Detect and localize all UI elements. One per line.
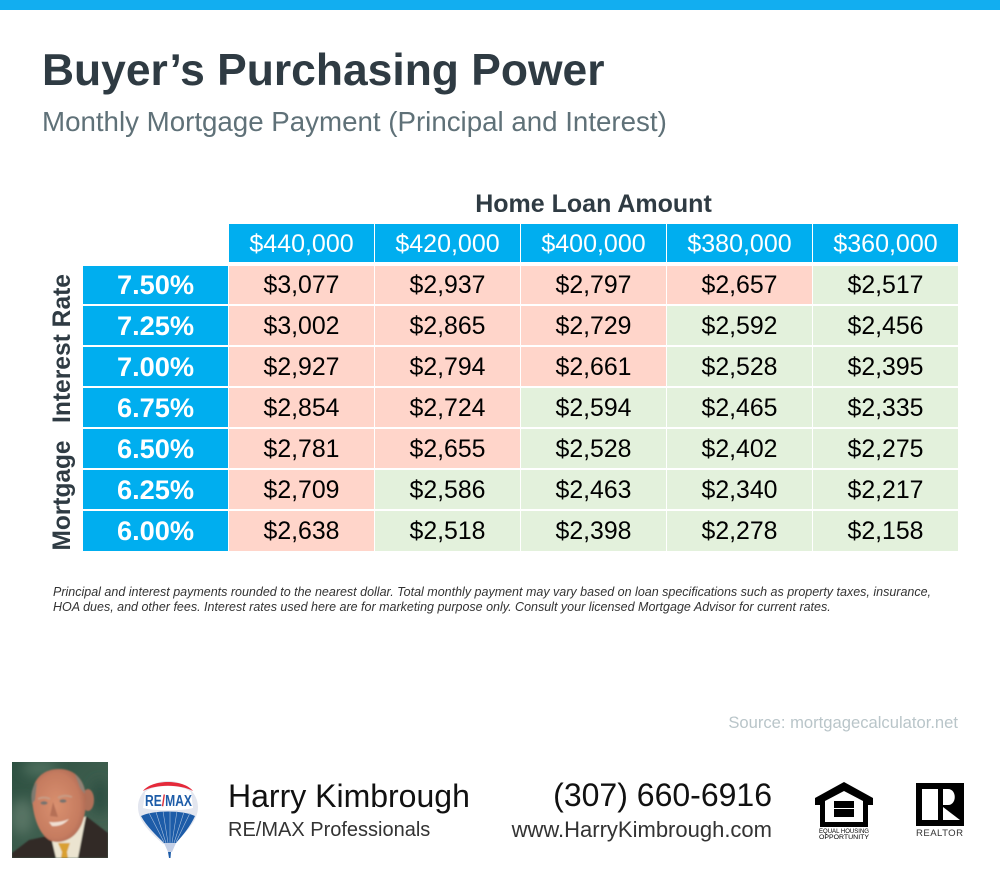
table: monthly payments: $2,937 <box>410 272 486 299</box>
table: monthly payments: $2,335 <box>848 395 924 422</box>
footnote <box>53 585 931 614</box>
table: monthly payments: $2,709 <box>264 477 340 504</box>
axis label: mortgage interest rate <box>48 274 76 550</box>
table: monthly payments: $2,794 <box>410 354 486 381</box>
table: monthly payments: $2,865 <box>410 313 486 340</box>
title: Buyer’s Purchasing Power <box>42 46 604 95</box>
table: monthly payments: $2,854 <box>264 395 340 422</box>
table: monthly payments: $2,340 <box>702 477 778 504</box>
table: monthly payments: $2,655 <box>410 436 486 463</box>
table: monthly payments: $2,528 <box>556 436 632 463</box>
table: monthly payments: $380,000 <box>687 230 792 258</box>
table: monthly payments: $2,927 <box>264 354 340 381</box>
table: monthly payments: 7.50% <box>117 269 194 300</box>
table: monthly payments: $2,594 <box>556 395 632 422</box>
table: monthly payments: $360,000 <box>833 230 938 258</box>
table: monthly payments: $2,278 <box>702 518 778 545</box>
table: monthly payments: $2,395 <box>848 354 924 381</box>
table: monthly payments: $2,517 <box>848 272 924 299</box>
icon: RE/MAX balloon: RE/MAX <box>145 793 193 810</box>
table: monthly payments: $3,002 <box>264 313 340 340</box>
table: monthly payments: $2,724 <box>410 395 486 422</box>
table: monthly payments: $3,077 <box>264 272 340 299</box>
table: monthly payments: $2,592 <box>702 313 778 340</box>
footnote: HOA dues, and other fees. Interest rates used here are for marketing purpose only. Consult your licensed Mortgage Advisor for current rates. <box>53 600 831 614</box>
heading: home loan amount: Home Loan Amount <box>475 190 712 218</box>
icon: equal housing opportunity: OPPORTUNITY <box>819 834 870 841</box>
table: monthly payments: $2,586 <box>410 477 486 504</box>
table: monthly payments: $2,275 <box>848 436 924 463</box>
table: monthly payments: $420,000 <box>395 230 500 258</box>
agency: RE/MAX Professionals <box>228 818 430 840</box>
table: monthly payments: 6.25% <box>117 474 194 505</box>
agent name: Harry Kimbrough <box>228 778 470 814</box>
table: monthly payments: $2,518 <box>410 518 486 545</box>
table: monthly payments: $2,638 <box>264 518 340 545</box>
table: monthly payments: 6.50% <box>117 433 194 464</box>
table: monthly payments: 7.25% <box>117 310 194 341</box>
table: monthly payments: $2,402 <box>702 436 778 463</box>
table: monthly payments: $2,528 <box>702 354 778 381</box>
table: monthly payments: 6.75% <box>117 392 194 423</box>
photo: agent portrait <box>12 762 108 858</box>
axis label: mortgage interest rate: Interest Rate <box>48 274 76 423</box>
table: monthly payments: $2,729 <box>556 313 632 340</box>
table: monthly payments: $2,463 <box>556 477 632 504</box>
source: Source: mortgagecalculator.net <box>728 713 958 732</box>
subtitle: Monthly Mortgage Payment (Principal and Interest) <box>42 106 667 137</box>
icon: equal housing opportunity <box>815 782 873 841</box>
table: monthly payments: $2,217 <box>848 477 924 504</box>
icon: equal housing opportunity: EQUAL HOUSING <box>819 828 869 835</box>
table: monthly payments: $2,781 <box>264 436 340 463</box>
phone: (307) 660-6916 <box>553 777 772 813</box>
website: www.HarryKimbrough.com <box>512 817 772 842</box>
table: monthly payments: 7.00% <box>117 351 194 382</box>
table: monthly payments: $2,465 <box>702 395 778 422</box>
top bar <box>0 0 1000 10</box>
icon: RE/MAX balloon <box>138 781 198 858</box>
footnote: Principal and interest payments rounded to the nearest dollar. Total monthly payment may vary based on loan specifications such as property taxes, insurance, <box>53 585 931 599</box>
table: monthly payments: $400,000 <box>541 230 646 258</box>
table: monthly payments: 6.00% <box>117 515 194 546</box>
table: monthly payments: $2,398 <box>556 518 632 545</box>
table: monthly payments: $2,661 <box>556 354 632 381</box>
table: monthly payments: $440,000 <box>249 230 354 258</box>
table: monthly payments: $2,158 <box>848 518 924 545</box>
table: monthly payments: $2,657 <box>702 272 778 299</box>
table: monthly payments <box>83 224 958 551</box>
table: monthly payments: $2,456 <box>848 313 924 340</box>
axis label: mortgage interest rate: Mortgage <box>48 440 76 550</box>
table: monthly payments: $2,797 <box>556 272 632 299</box>
icon: realtor <box>916 783 964 838</box>
